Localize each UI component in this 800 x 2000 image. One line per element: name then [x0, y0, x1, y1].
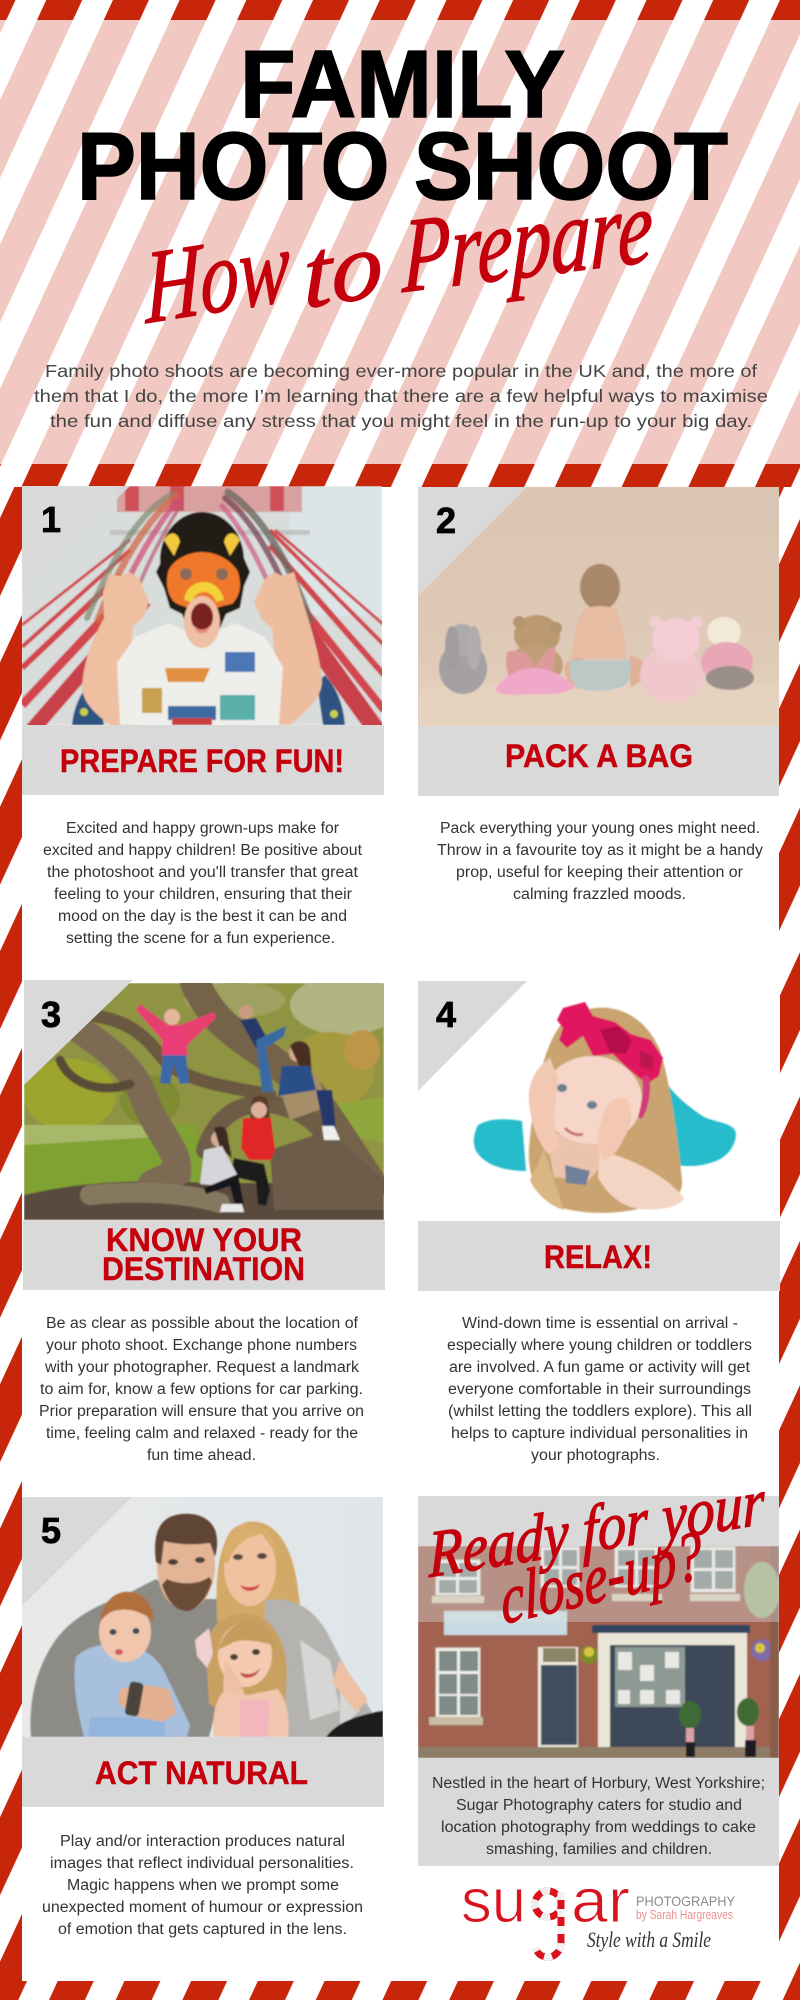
heading 4: RELAX!	[544, 1239, 652, 1275]
subtitle: how to prepare: How	[143, 207, 291, 346]
body text 1: mood on the day is the best it can be and	[58, 908, 347, 925]
card text: location photography from weddings to cake	[441, 1819, 756, 1836]
body text 4	[447, 1315, 752, 1464]
body text 3: Prior preparation will ensure that you arrive on	[39, 1403, 364, 1420]
corner triangle 5	[22, 1497, 132, 1606]
title bar 2	[418, 726, 779, 796]
corner triangle 1	[22, 486, 130, 593]
panel 6: ready for your close-up	[418, 1466, 780, 1866]
body text 5: of emotion that gets captured in the lens.	[58, 1921, 347, 1938]
heading 1: PREPARE FOR FUN!	[60, 743, 344, 779]
body text 4: Wind-down time is essential on arrival -	[462, 1315, 738, 1332]
card text: Nestled in the heart of Horbury, West Yorkshire;	[432, 1775, 765, 1792]
body text 2: Throw in a favourite toy as it might be a handy	[437, 842, 763, 859]
photo: family of four	[22, 1497, 383, 1737]
body text 1: feeling to your children, ensuring that their	[54, 886, 352, 903]
logo wordmark: su	[461, 1867, 526, 1936]
body text 3: with your photographer. Request a landmark	[44, 1359, 359, 1376]
corner triangle 3	[24, 980, 133, 1085]
title bar 5	[22, 1737, 384, 1807]
number 5: 5	[41, 1510, 61, 1551]
body text 1: the photoshoot and you'll transfer that great	[47, 864, 359, 881]
body text 3: time, feeling calm and relaxed - ready for the	[46, 1425, 358, 1442]
card text	[432, 1775, 765, 1858]
body text 5	[42, 1833, 363, 1938]
body text 5: unexpected moment of humour or expression	[42, 1899, 363, 1916]
photo: girl with pink flowers	[472, 996, 780, 1220]
title bar 4	[418, 1221, 780, 1291]
intro text: the fun and diffuse any stress that you might feel in the run-up to your big day.	[50, 411, 752, 431]
body text 1	[43, 820, 363, 947]
body text 3: your photo shoot. Exchange phone numbers	[46, 1337, 357, 1354]
body text 5: Magic happens when we prompt some	[67, 1877, 339, 1894]
body text 4: everyone comfortable in their surroundings	[448, 1381, 751, 1398]
body text 4: are involved. A fun game or activity will get	[449, 1359, 751, 1376]
body text 1: setting the scene for a fun experience.	[66, 930, 335, 947]
body text 2: Pack everything your young ones might need.	[440, 820, 760, 837]
subtitle: how to prepare: Prepare	[401, 167, 654, 316]
photo: studio shopfront	[418, 1546, 780, 1758]
intro text	[34, 361, 768, 431]
heading 2: PACK A BAG	[505, 738, 693, 774]
number 4: 4	[436, 994, 456, 1035]
panel 1: prepare for fun	[22, 486, 384, 947]
card text: smashing, families and children.	[486, 1841, 712, 1858]
logo photography label: PHOTOGRAPHY	[636, 1893, 736, 1909]
corner triangle 4	[418, 981, 527, 1091]
title bar 1	[22, 725, 384, 795]
panel 4: relax	[418, 981, 780, 1464]
body text 5: images that reflect individual personalities.	[50, 1855, 354, 1872]
body text 1: Excited and happy grown-ups make for	[66, 820, 339, 837]
body text 3: to aim for, know a few options for car parking.	[40, 1381, 363, 1398]
title bar 3	[23, 1220, 385, 1290]
panel 5: act natural	[22, 1497, 384, 1938]
title: PHOTO SHOOT	[77, 113, 728, 220]
icon: candy cane g	[535, 1891, 561, 1957]
subtitle: how to prepare: to	[302, 209, 383, 329]
body text 4: (whilst letting the toddlers explore). This all	[448, 1403, 752, 1420]
heading 3	[102, 1222, 305, 1287]
body text 3: Be as clear as possible about the location of	[46, 1315, 359, 1332]
corner triangle 2	[418, 487, 527, 596]
number 3: 3	[41, 994, 61, 1035]
grey card background	[418, 1496, 779, 1866]
script heading: close-up?	[498, 1516, 705, 1640]
title: FAMILY	[240, 31, 565, 138]
body text 1: excited and happy children! Be positive about	[43, 842, 363, 859]
heading 5: ACT NATURAL	[95, 1755, 308, 1791]
body text 4: helps to capture individual personalities in	[451, 1425, 748, 1442]
photo: family on willow tree	[24, 975, 400, 1220]
script heading	[427, 1466, 765, 1640]
logo byline: by Sarah Hargreaves	[636, 1908, 733, 1922]
panel 3: know your destination	[23, 975, 400, 1464]
number 1: 1	[41, 499, 61, 540]
logo: sugar photography	[461, 1867, 736, 1957]
heading 3: DESTINATION	[102, 1251, 305, 1287]
body text 3: fun time ahead.	[147, 1447, 256, 1464]
card text: Sugar Photography caters for studio and	[456, 1797, 742, 1814]
number 2: 2	[436, 500, 456, 541]
body text 5: Play and/or interaction produces natural	[60, 1833, 345, 1850]
panel 2: pack a bag	[418, 487, 779, 903]
body text 2	[437, 820, 763, 903]
logo tagline: Style with a Smile	[587, 1927, 711, 1952]
photo: baby and teddies	[418, 487, 779, 726]
intro text: them that I do, the more I’m learning that there are a few helpful ways to maximise	[34, 386, 768, 406]
logo wordmark	[461, 1867, 630, 1936]
photo: boy in lion mask	[22, 486, 384, 735]
body text 2: prop, useful for keeping their attention or	[456, 864, 743, 881]
upper wash over photo	[418, 1546, 779, 1622]
heading 3: KNOW YOUR	[106, 1222, 302, 1258]
body text 2: calming frazzled moods.	[513, 886, 686, 903]
body text 3	[39, 1315, 364, 1464]
body text 4: especially where young children or toddlers	[447, 1337, 752, 1354]
title	[77, 31, 728, 220]
logo wordmark: ar	[571, 1867, 630, 1936]
intro text: Family photo shoots are becoming ever-more popular in the UK and, the more of	[45, 361, 757, 381]
subtitle: how to prepare	[143, 167, 654, 346]
body text 4: your photographs.	[531, 1447, 660, 1464]
